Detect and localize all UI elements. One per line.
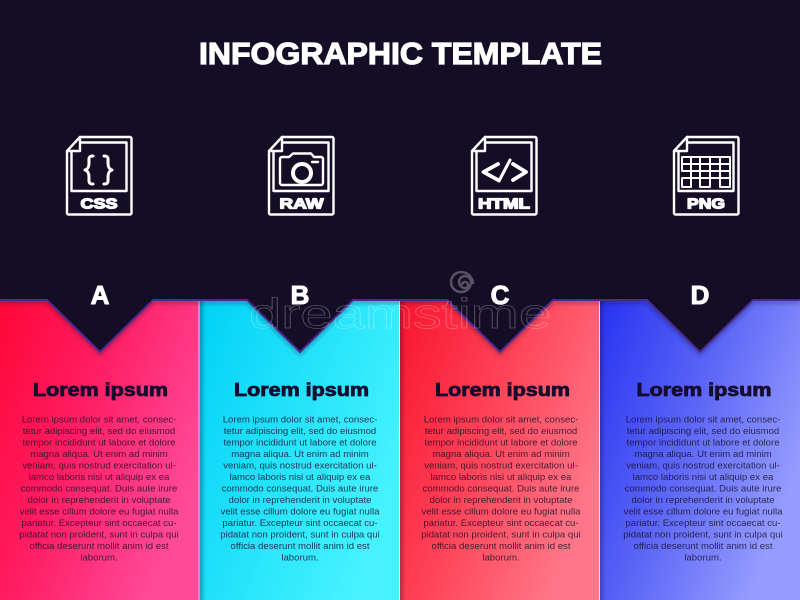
text block C: tetur adipiscing elit, sed do eiusmod [425, 426, 577, 437]
panel: C [400, 300, 600, 600]
text block B: tetur adipiscing elit, sed do eiusmod [224, 426, 376, 437]
text block B: lamco laboris nisi ut aliquip ex ea [230, 472, 371, 483]
text block D: lamco laboris nisi ut aliquip ex ea [633, 472, 774, 483]
text block C: Lorem ipsum dolor sit amet, consec- [424, 414, 578, 426]
text block A: pariatur. Excepteur sint occaecat cu- [21, 518, 177, 529]
text block B: dolor in reprehenderit in voluptate [229, 495, 371, 506]
text block D: pidatat non proident, sunt in culpa qui [623, 530, 783, 540]
text block D: magna aliqua. Ut enim ad minim [634, 449, 772, 460]
text block A: officia deserunt mollit anim id est [30, 541, 169, 552]
icon: HTML file [472, 137, 536, 214]
text block C: commodo consequat. Duis aute irure [423, 484, 579, 494]
text block A: laborum. [80, 552, 118, 564]
panel: A [0, 300, 200, 600]
heading C: Lorem ipsum [435, 379, 570, 400]
text block A: veniam, quis nostrud exercitation ul- [22, 460, 176, 472]
panel: D [600, 300, 800, 600]
text block B: velit esse cillum dolore eu fugiat nulla [221, 506, 380, 518]
text block D: Lorem ipsum dolor sit amet, consec- [626, 414, 780, 426]
text block A: dolor in reprehenderit in voluptate [28, 495, 170, 506]
chevron outline [0, 300, 800, 352]
letter C: C [491, 280, 510, 310]
text block B: officia deserunt mollit anim id est [230, 541, 370, 552]
text block D: veniam, quis nostrud exercitation ul- [626, 460, 780, 472]
text block D: pariatur. Excepteur sint occaecat cu- [625, 518, 781, 529]
text block B: pidatat non proident, sunt in culpa qui [220, 530, 380, 540]
text block A: pidatat non proident, sunt in culpa qui [19, 530, 179, 540]
text block B: commodo consequat. Duis aute irure [222, 484, 378, 494]
text block B: pariatur. Excepteur sint occaecat cu- [222, 518, 378, 529]
letter A: A [91, 280, 110, 310]
heading A: Lorem ipsum [33, 379, 168, 400]
watermark [249, 272, 551, 337]
icon: RAW file [269, 137, 334, 214]
text block C: lamco laboris nisi ut aliquip ex ea [431, 472, 572, 483]
text block C: magna aliqua. Ut enim ad minim [432, 449, 570, 460]
text block B: magna aliqua. Ut enim ad minim [231, 449, 369, 460]
heading D: Lorem ipsum [636, 379, 772, 400]
text block D: dolor in reprehenderit in voluptate [632, 495, 774, 506]
text block C: veniam, quis nostrud exercitation ul- [424, 460, 578, 472]
text block C: pariatur. Excepteur sint occaecat cu- [423, 518, 579, 529]
text block B: laborum. [281, 552, 319, 564]
text block A: commodo consequat. Duis aute irure [21, 484, 177, 494]
text block A: lamco laboris nisi ut aliquip ex ea [29, 472, 170, 483]
title: INFOGRAPHIC TEMPLATE [199, 36, 602, 71]
text block C: tempor incididunt ut labore et dolore [424, 438, 578, 448]
text block D: velit esse cillum dolore eu fugiat nulla [624, 506, 783, 518]
text block D: laborum. [684, 552, 722, 564]
icon: PNG file [674, 137, 738, 214]
text block D: officia deserunt mollit anim id est [634, 541, 773, 552]
heading B: Lorem ipsum [234, 379, 369, 400]
icon: HTML file: HTML [478, 196, 530, 212]
text block C: officia deserunt mollit anim id est [432, 541, 571, 552]
text block B: tempor incididunt ut labore et dolore [223, 438, 377, 448]
text block A: velit esse cillum dolore eu fugiat nulla [20, 506, 179, 518]
text block A: Lorem ipsum dolor sit amet, consec- [22, 414, 176, 426]
panel: B [200, 300, 400, 600]
text block D: tetur adipiscing elit, sed do eiusmod [627, 426, 779, 437]
icon: RAW file: RAW [280, 196, 325, 212]
text block C: pidatat non proident, sunt in culpa qui [421, 530, 581, 540]
icon: CSS file: CSS [80, 196, 118, 212]
text block D: tempor incididunt ut labore et dolore [626, 438, 780, 448]
text block A: magna aliqua. Ut enim ad minim [30, 449, 168, 460]
text block C: dolor in reprehenderit in voluptate [430, 495, 572, 506]
text block D: commodo consequat. Duis aute irure [625, 484, 781, 494]
letter B: B [291, 280, 309, 310]
text block A: tempor incididunt ut labore et dolore [22, 438, 176, 448]
icon: PNG file: PNG [687, 196, 725, 212]
text block C: velit esse cillum dolore eu fugiat nulla [422, 506, 581, 518]
text block B: Lorem ipsum dolor sit amet, consec- [223, 414, 377, 426]
letter D: D [691, 280, 709, 310]
text block A: tetur adipiscing elit, sed do eiusmod [23, 426, 175, 437]
icon: CSS file [67, 137, 132, 214]
text block B: veniam, quis nostrud exercitation ul- [223, 460, 377, 472]
watermark: dreamstime [249, 290, 551, 337]
text block C: laborum. [482, 552, 520, 564]
